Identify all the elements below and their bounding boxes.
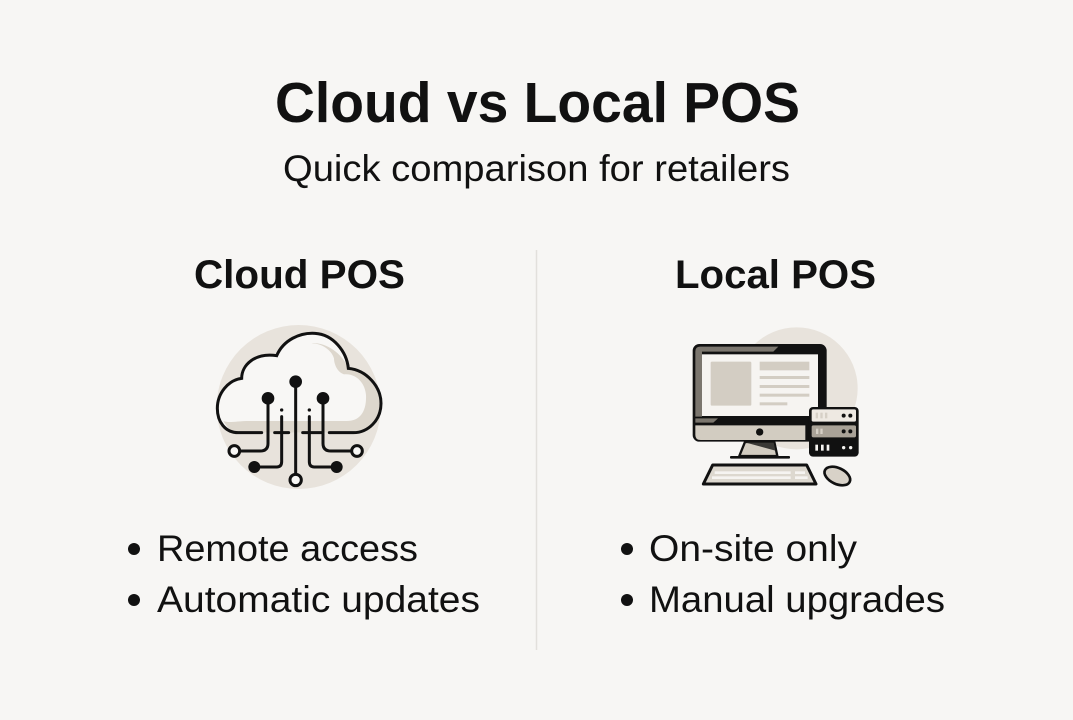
subtitle: Quick comparison for retailers <box>283 148 790 189</box>
list: Cloud POS benefits: Automatic updates <box>157 579 480 620</box>
icon: cloud circuit <box>217 325 381 489</box>
heading: Local POS: Local POS <box>675 253 876 297</box>
list: Cloud POS benefits: Remote access <box>157 528 418 569</box>
icon: desktop computer with server stack <box>693 327 859 489</box>
heading: Cloud POS: Cloud POS <box>194 253 405 297</box>
list: Local POS traits <box>621 528 945 620</box>
list: Cloud POS benefits <box>128 528 480 620</box>
list: Local POS traits: Manual upgrades <box>649 579 945 620</box>
list: Local POS traits: On-site only <box>649 528 858 569</box>
title: Cloud vs Local POS <box>275 71 800 135</box>
